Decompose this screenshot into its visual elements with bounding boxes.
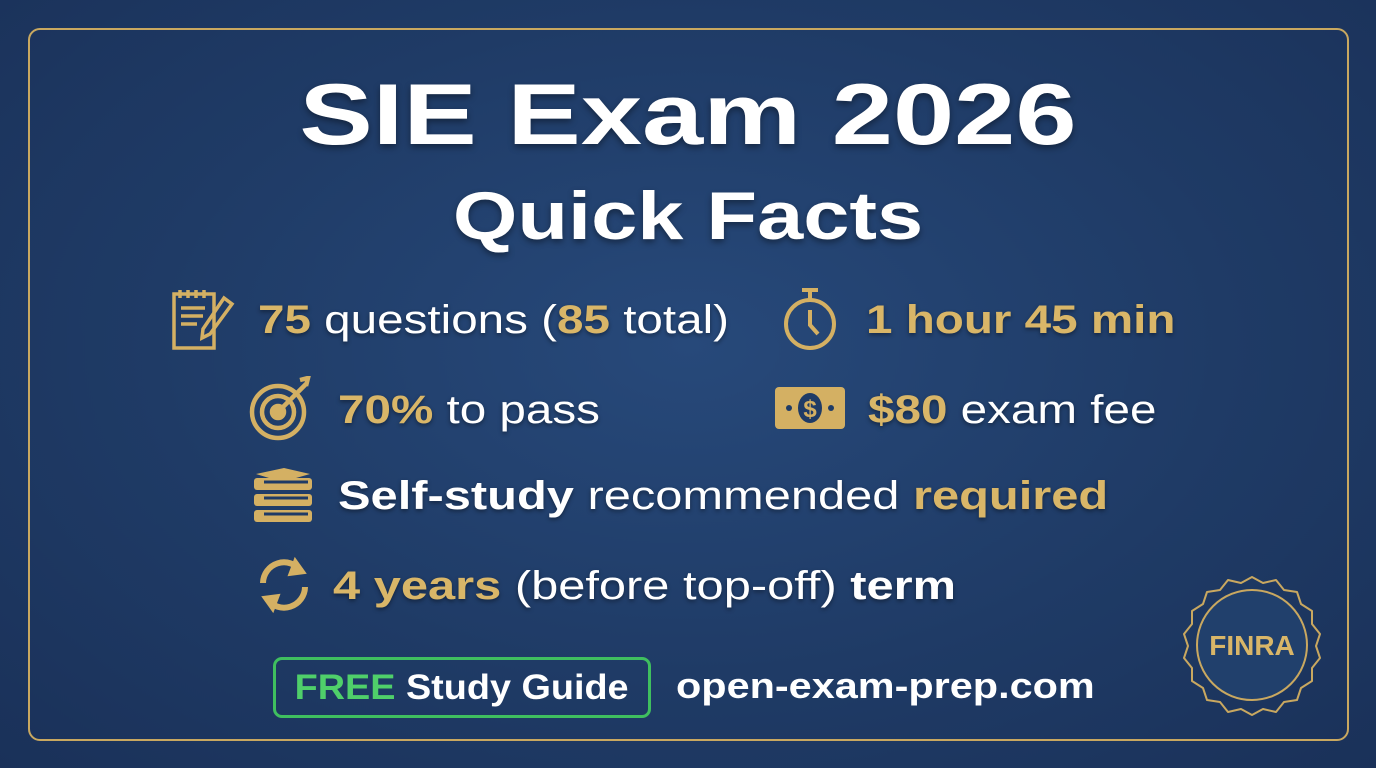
seal: FINRA: FINRA: [1209, 630, 1295, 661]
cta: free study guide: FREE Study Guide: [295, 668, 629, 707]
seal: FINRA: [1183, 576, 1321, 716]
icon: refresh: [260, 557, 308, 613]
subtitle: Quick Facts: [453, 178, 923, 254]
title: SIE Exam 2026: [299, 67, 1077, 163]
icon: stopwatch: [784, 288, 836, 350]
fact: study: Self-study recommended required: [338, 474, 1108, 518]
fact: time: 1 hour 45 min: [866, 298, 1175, 342]
icon: notepad: [172, 290, 234, 350]
icon: target: [250, 376, 311, 440]
fact: fee: $80 exam fee: [868, 388, 1156, 432]
fact: questions: 75 questions (85 total): [258, 298, 729, 342]
icon: money: [775, 387, 845, 429]
fact: term: 4 years (before top-off) term: [333, 564, 956, 608]
icon: money: $: [803, 396, 817, 423]
cta: free study guide: [273, 657, 651, 718]
icon: books: [254, 468, 312, 522]
fact: passing score: 70% to pass: [338, 388, 600, 432]
website url: open-exam-prep.com: [676, 665, 1095, 706]
